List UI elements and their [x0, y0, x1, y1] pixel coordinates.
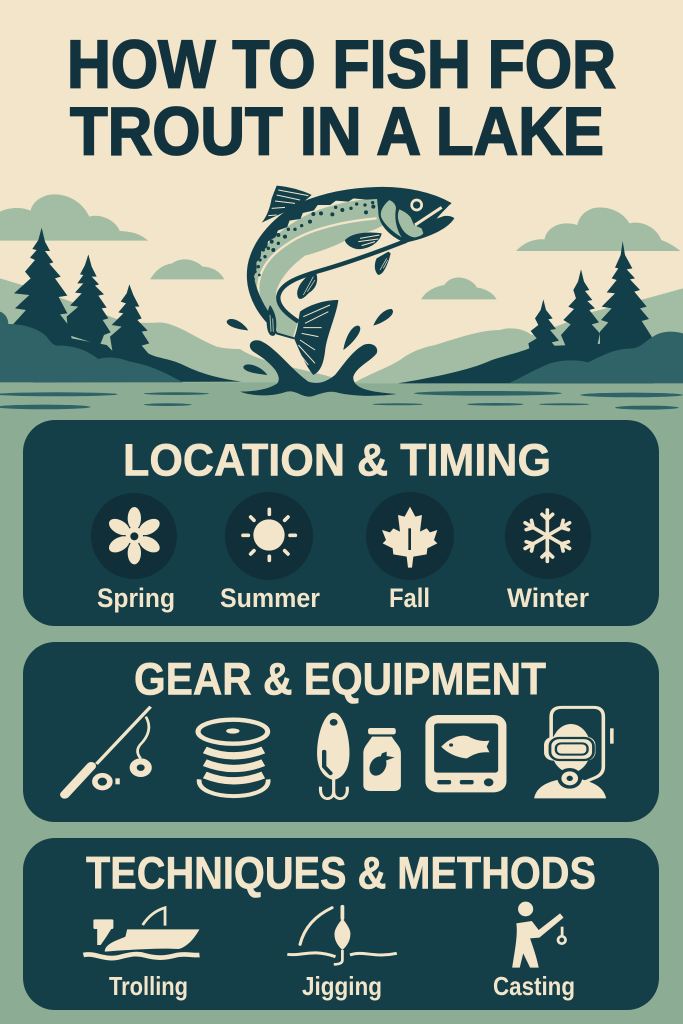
- icon: bait jar: [363, 728, 401, 791]
- pectoral fin: [345, 232, 382, 249]
- belly line: [278, 241, 407, 322]
- icon: spoon lure: [317, 713, 349, 799]
- pelvic fin: [297, 271, 317, 299]
- icon: line spool: [198, 720, 268, 796]
- icon: fish finder: [425, 715, 506, 792]
- left teal foreground hill: [0, 312, 183, 382]
- right distant hill: [353, 288, 683, 383]
- outer lower body edge: [267, 318, 294, 338]
- technique labels: [109, 971, 575, 1001]
- icon: casting angler: [512, 902, 566, 968]
- right teal foreground hill: [508, 332, 683, 383]
- icon: jigging lure: [287, 907, 397, 964]
- background: lake water: [0, 382, 683, 1024]
- technique icons: [83, 902, 566, 968]
- icon: fishing rod: [65, 707, 151, 795]
- clouds: [0, 194, 680, 299]
- left pine trees: [13, 228, 242, 382]
- season labels: Winter: [507, 583, 589, 613]
- dorsal fin: [262, 186, 312, 223]
- icon: jumping trout with splash: [227, 186, 454, 397]
- icon: trolling boat: [83, 908, 199, 958]
- technique labels: Casting: [493, 971, 575, 1001]
- speckles: [252, 201, 375, 281]
- heading: techniques and methods: TECHNIQUES & METHODS: [86, 848, 596, 898]
- right shore with pine trees: [353, 241, 683, 383]
- season labels: Summer: [220, 583, 320, 613]
- panel: location and timing: [23, 420, 659, 626]
- background: sky: [0, 0, 683, 383]
- heading: gear and equipment: GEAR & EQUIPMENT: [134, 654, 546, 704]
- water ripples: [0, 391, 683, 410]
- panel: techniques and methods: [23, 838, 659, 1010]
- icon: winter snowflake: [505, 493, 591, 579]
- technique labels: Jigging: [302, 971, 382, 1001]
- title: TROUT IN A LAKE: [70, 94, 604, 170]
- season labels: Fall: [389, 583, 430, 613]
- gear icons: [65, 707, 614, 799]
- icon: diver with mask: [534, 707, 614, 798]
- body fill: [253, 198, 387, 338]
- title: HOW TO FISH FOR: [67, 26, 616, 102]
- dark back: [247, 188, 451, 322]
- anal fin: [267, 305, 276, 336]
- icon: spring flower: [91, 493, 177, 579]
- panel: gear and equipment: [23, 642, 659, 822]
- season labels: [97, 583, 589, 613]
- heading: location and timing: LOCATION & TIMING: [123, 434, 551, 486]
- water splash: [227, 309, 397, 397]
- icon: summer sun: [225, 492, 313, 580]
- left shore with pine trees: [0, 228, 331, 382]
- icon: fall maple leaf: [366, 492, 454, 580]
- left distant hill: [0, 278, 331, 382]
- title: [67, 26, 616, 170]
- right pine trees: [398, 241, 653, 383]
- season labels: Spring: [97, 583, 175, 613]
- lateral line: [258, 218, 377, 307]
- technique labels: Trolling: [109, 971, 188, 1001]
- tail fin: [294, 300, 338, 375]
- ventral fin: [375, 252, 391, 275]
- trout head: [377, 191, 454, 243]
